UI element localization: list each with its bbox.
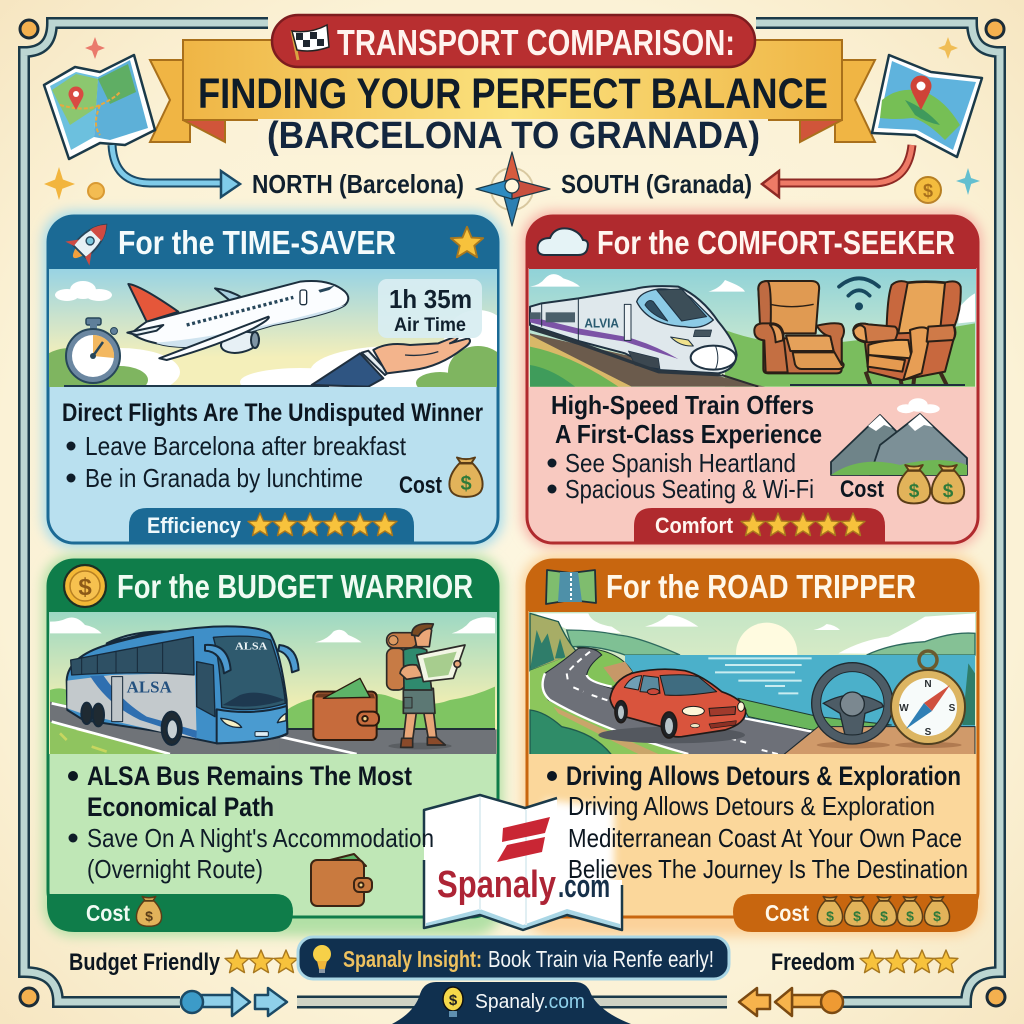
cost bar: [733, 894, 978, 932]
panel: comfort-seeker: [522, 211, 982, 548]
callout: air time: [378, 279, 482, 338]
icon: gold star: [451, 227, 483, 257]
icon: airplane: [127, 281, 348, 360]
icon: left map: [44, 55, 155, 159]
title text background patch: [258, 119, 768, 155]
icon: cloud: [538, 228, 588, 255]
bullet list: driving: Mediterranean Coast At Your Own Pace: [568, 823, 962, 853]
icon: checkered flag: [292, 25, 329, 60]
icon: alvia train: [530, 286, 737, 377]
title: time-saver: For the TIME-SAVER: [118, 224, 396, 261]
heading: ALSA bus: ALSA Bus Remains The Most: [87, 761, 412, 791]
arrow: to north: [112, 145, 240, 197]
icon: red car: [610, 669, 746, 738]
rating: comfort: [634, 508, 885, 543]
icon: road map: [546, 570, 596, 604]
bullet list: Spacious Seating & Wi-Fi: [565, 474, 814, 504]
icon: ALSA bus: ALSA: [127, 677, 172, 696]
scene: bus and traveller: [49, 611, 497, 756]
logo domain: .com: [558, 868, 610, 904]
icon: rocket: [61, 213, 118, 270]
icon: steering wheel: [812, 663, 893, 744]
icon: compass: W: [899, 703, 909, 714]
icon: coin: [64, 565, 106, 607]
title pill: [272, 15, 755, 67]
scene: plane in sky: [49, 269, 497, 387]
header: comfort-seeker: [527, 216, 978, 268]
cost bar: $: [145, 908, 153, 924]
icon: compass: [891, 651, 965, 744]
header: budget warrior: [48, 560, 498, 611]
icon: open hand: [312, 336, 470, 387]
title: comfort-seeker: For the COMFORT-SEEKER: [597, 224, 955, 261]
bullet list: Leave Barcelona after breakfast: [85, 431, 407, 461]
bullet list: driving: Driving Allows Detours & Exploration: [568, 791, 935, 821]
icon: compass: S: [949, 703, 956, 714]
icon: armchair: [853, 281, 961, 385]
callout: air time: Air Time: [394, 315, 466, 336]
insight label: Spanaly Insight:: [343, 946, 482, 972]
cost indicator: [840, 465, 964, 503]
bullet text: overnight saving: Save On A Night's Accommodation: [87, 823, 434, 853]
icon: coin bulb: [443, 987, 463, 1017]
cost indicator: $: [909, 481, 920, 502]
footer wordmark: Spanaly.com: [475, 991, 585, 1013]
bullet list: See Spanish Heartland: [565, 448, 796, 478]
heading: direct flights: Direct Flights Are The Undisputed Winner: [62, 399, 483, 427]
rating: comfort: Comfort: [655, 513, 734, 538]
arrow: to south: [762, 145, 912, 197]
cost bar: $: [826, 908, 834, 924]
icon: wifi: [839, 278, 879, 310]
sparkles and coins: $: [923, 181, 933, 201]
bullet text: overnight saving: (Overnight Route): [87, 854, 263, 884]
bullet text: overnight saving: [68, 823, 434, 884]
rating: freedom: [771, 949, 958, 976]
icon: coin: $: [78, 574, 92, 601]
cost indicator: Cost: [399, 472, 442, 499]
cost bar: $: [933, 908, 941, 924]
icon: recliner seat: [754, 281, 844, 373]
cost bar: Cost: [765, 900, 809, 926]
main title: FINDING YOUR PERFECT BALANCE: [198, 70, 828, 118]
cost indicator: $: [943, 481, 954, 502]
scene: coastal road: [529, 611, 976, 755]
logo map: Spanaly.com: [424, 795, 622, 930]
cost bar: [47, 894, 293, 932]
rating: efficiency: Efficiency: [147, 513, 242, 538]
cost indicator: Cost: [840, 476, 884, 503]
panel: road tripper: [522, 555, 982, 936]
icon: backpacker: [387, 624, 465, 749]
cost bar: Cost: [86, 900, 130, 926]
footer tab: [392, 982, 631, 1024]
callout: air time: 1h 35m: [389, 284, 472, 314]
cost indicator: [399, 458, 483, 499]
heading: ALSA bus: Economical Path: [87, 792, 274, 822]
cost bar: $: [906, 908, 914, 924]
heading: ALSA bus: [68, 761, 412, 822]
insight tip: Book Train via Renfe early!: [488, 946, 714, 972]
cost indicator: $: [460, 473, 472, 495]
bullet list: Be in Granada by lunchtime: [85, 463, 363, 493]
icon: wallet: [313, 678, 379, 740]
icon: logo stripes: [497, 817, 550, 862]
bottom arrows left: [181, 988, 287, 1016]
icon: light bulb: [313, 945, 331, 973]
bullet list: [66, 431, 407, 493]
header: road tripper: [527, 560, 978, 611]
icon: coin bulb: $: [449, 992, 458, 1009]
header: time-saver: [48, 216, 498, 268]
icon: compass: S: [925, 727, 932, 738]
subtitle: (BARCELONA TO GRANADA): [267, 115, 760, 157]
icon: stopwatch: [66, 318, 120, 383]
rating: budget friendly: Budget Friendly: [69, 949, 221, 976]
icon: alvia train: ALVIA: [584, 316, 619, 331]
scene: train and seats: [529, 268, 976, 387]
panel: budget warrior: [43, 555, 503, 936]
heading: transport comparison: TRANSPORT COMPARISON:: [337, 22, 735, 63]
icon: small wallet: [311, 854, 372, 906]
cost bar: $: [880, 908, 888, 924]
icon: right map: [872, 55, 982, 157]
insight pill: [298, 937, 729, 979]
heading: high-speed train: A First-Class Experience: [555, 419, 822, 449]
icon: ALSA bus: [67, 626, 299, 745]
sparkles and coins: [44, 37, 980, 203]
logo name: Spanaly: [437, 864, 556, 906]
label: north: NORTH (Barcelona): [252, 169, 464, 199]
bullet list: driving: [547, 761, 968, 884]
icon: compass: N: [924, 679, 932, 690]
bullet list: driving: Believes The Journey Is The Destination: [568, 854, 968, 884]
title: budget warrior: For the BUDGET WARRIOR: [117, 568, 473, 605]
rating: efficiency: [129, 508, 414, 543]
bottom arrows right: [739, 988, 843, 1016]
icon: compass rose: [476, 152, 550, 226]
cost bar: $: [853, 908, 861, 924]
title: road tripper: For the ROAD TRIPPER: [606, 568, 916, 605]
bullet list: [548, 448, 814, 504]
panel: time-saver: [36, 211, 512, 548]
heading: high-speed train: High-Speed Train Offers: [551, 390, 814, 420]
heading: high-speed train: [551, 390, 822, 449]
icon: ALSA bus: ALSA: [235, 640, 267, 652]
label: south: SOUTH (Granada): [561, 169, 752, 199]
icon: mountains: [831, 398, 967, 475]
yellow title banner: [150, 40, 875, 142]
rating: freedom: Freedom: [771, 949, 855, 976]
